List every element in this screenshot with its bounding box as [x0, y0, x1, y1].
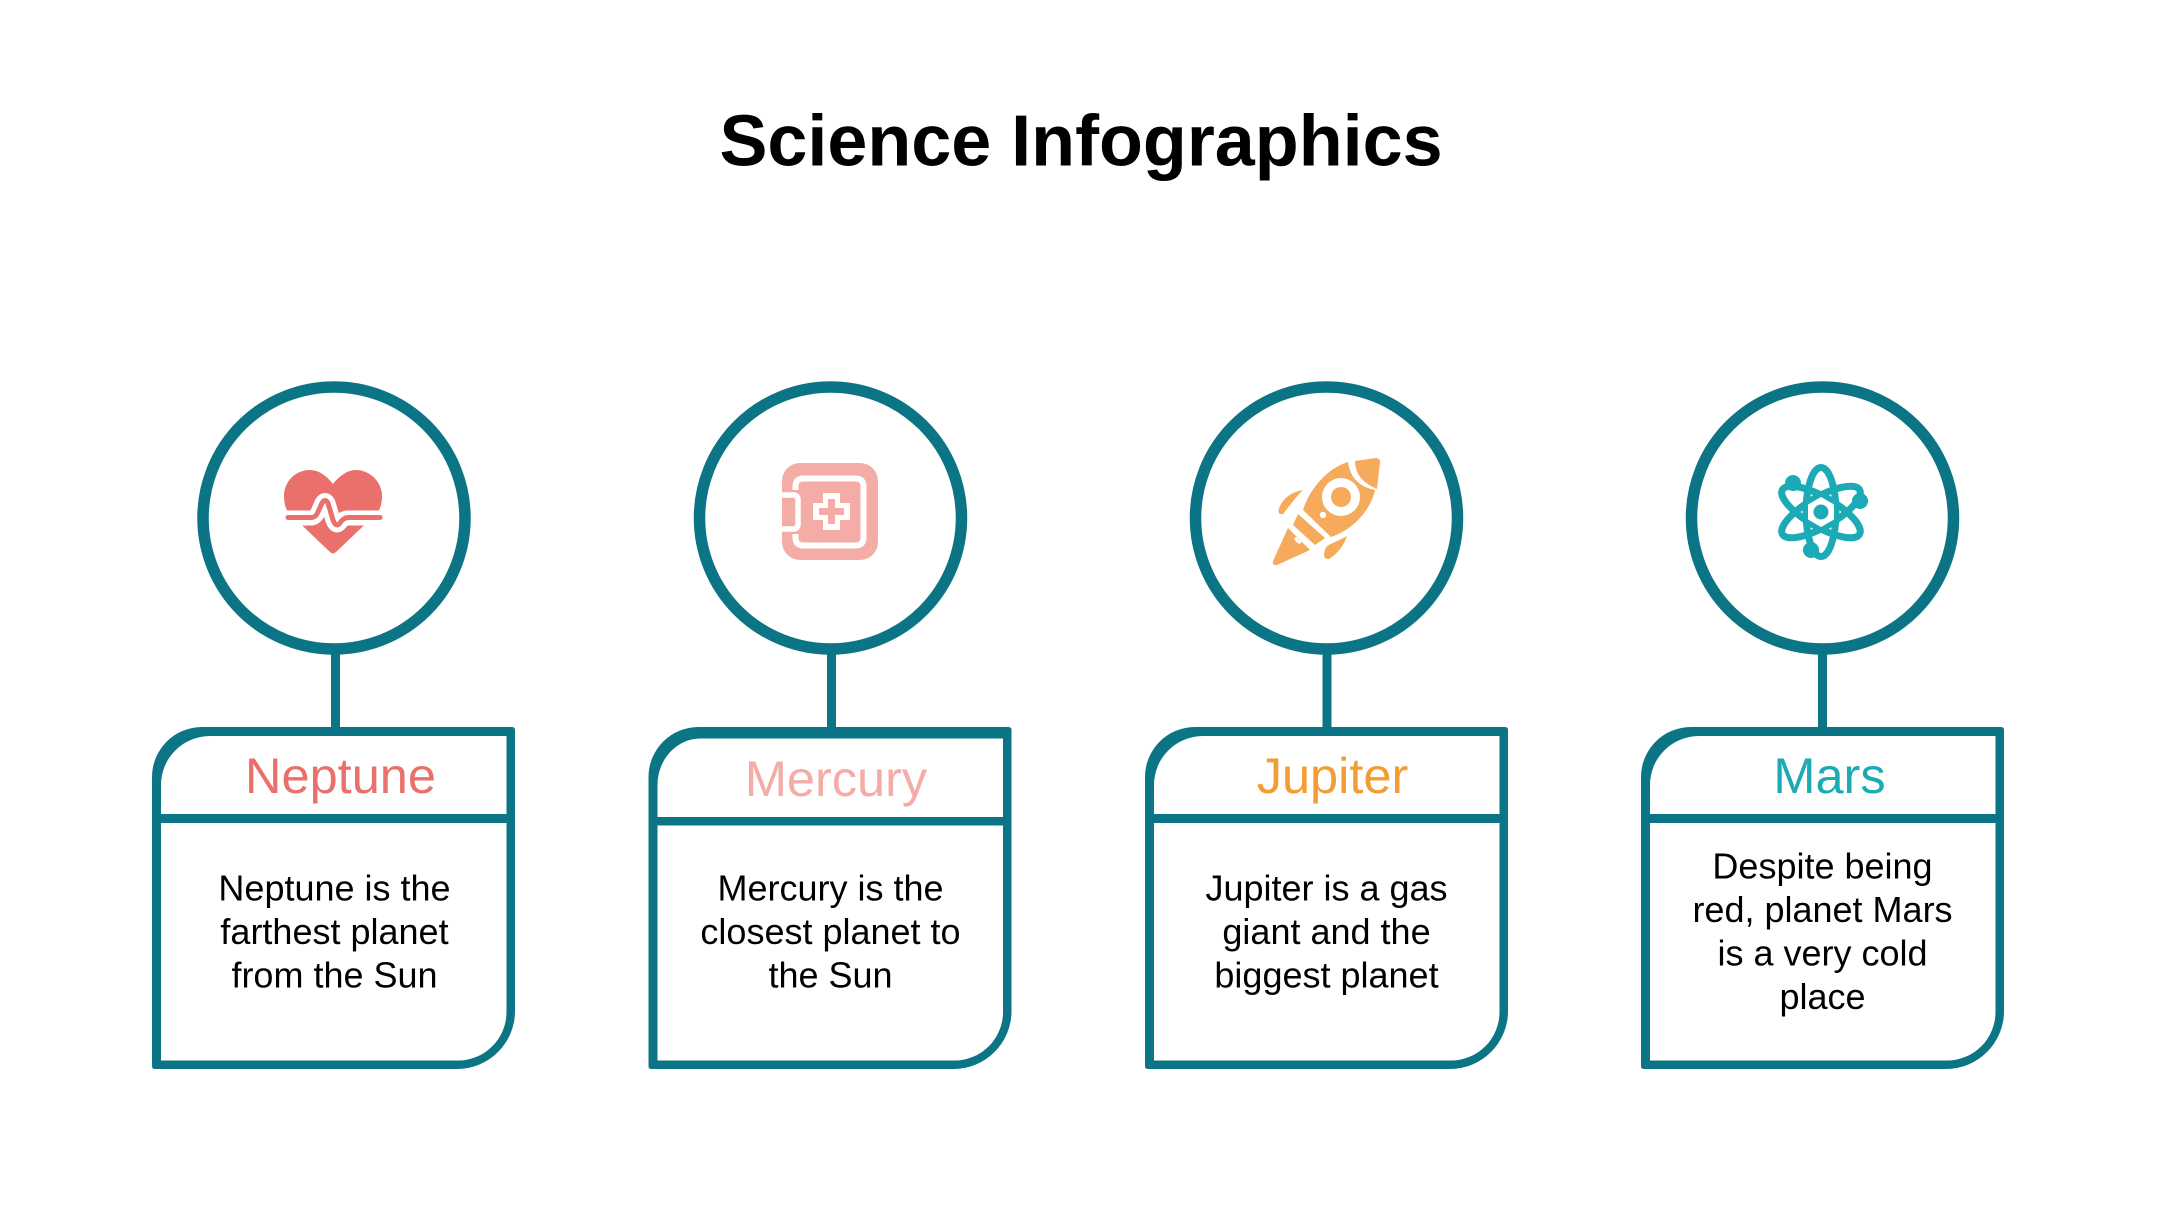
card: Mars [1641, 727, 2004, 1069]
panel: Jupiter [1145, 387, 1508, 1069]
panel: Mercury [648, 387, 1012, 1069]
card: Mercury [648, 727, 1012, 1069]
text: Jupiter description: Jupiter is a gas [1205, 868, 1448, 908]
connector stem: Mars [1818, 650, 1827, 732]
circle: Mars [1692, 387, 1954, 649]
text: Neptune description: from the Sun [231, 954, 438, 996]
heading: Jupiter: Jupiter [1257, 747, 1408, 804]
text: Jupiter description: giant and the [1222, 911, 1431, 952]
text: Mars description: red, planet Mars [1692, 889, 1953, 930]
text: Mercury description: Mercury is the [717, 868, 944, 908]
card: Neptune [152, 727, 515, 1069]
icon: heart with pulse [270, 470, 396, 554]
panel: Neptune [152, 387, 515, 1069]
circle: Mercury [700, 387, 962, 649]
heading: Mercury: Mercury [745, 750, 928, 807]
icon: rocket [1273, 458, 1380, 565]
text: Mercury description: the Sun [768, 954, 893, 996]
panel: Mars [1641, 387, 2004, 1069]
text: Mercury description: closest planet to [700, 911, 961, 952]
connector stem: Mercury [827, 650, 836, 732]
text: Neptune description: Neptune is the [218, 868, 451, 908]
circle: Neptune [203, 387, 465, 649]
text: Mars description: is a very cold [1717, 932, 1928, 974]
connector stem: Jupiter [1322, 650, 1332, 732]
text: Jupiter description: biggest planet [1214, 954, 1439, 996]
card: Jupiter [1145, 727, 1508, 1069]
text: Mars description: place [1779, 976, 1866, 1017]
heading: Neptune: Neptune [245, 747, 436, 804]
icon: atom [1775, 468, 1868, 558]
text: Neptune description: farthest planet [220, 911, 449, 952]
title: Science Infographics [719, 102, 1443, 182]
text: Mars description: Despite being [1712, 846, 1933, 886]
heading: Mars: Mars [1773, 747, 1886, 804]
circle: Jupiter [1196, 387, 1458, 649]
connector stem: Neptune [331, 650, 340, 732]
icon: medical book [780, 463, 878, 560]
